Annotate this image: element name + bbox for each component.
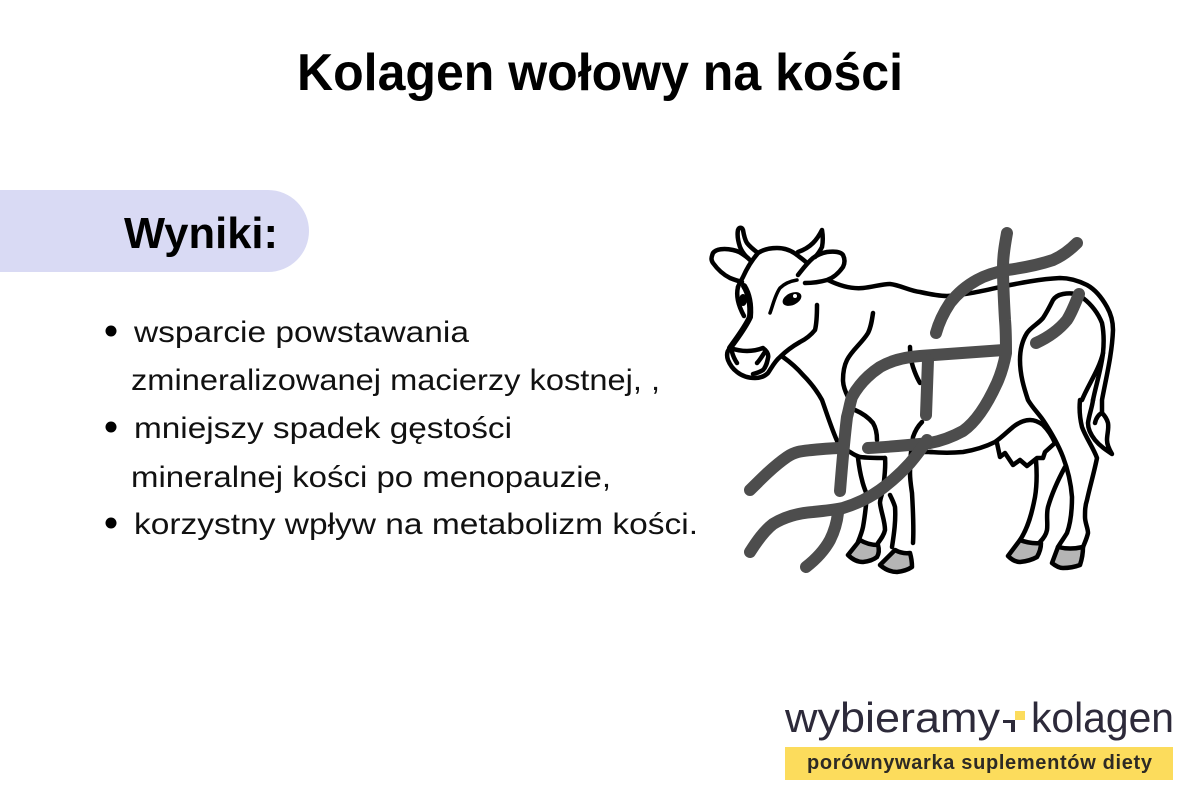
logo symbol — [1003, 711, 1025, 732]
panel: results heading: Wyniki: — [124, 209, 278, 258]
logo wordmark: wybieramy — [784, 694, 1000, 741]
results list: mniejszy spadek gęstości — [134, 412, 512, 445]
panel: results heading — [0, 190, 309, 272]
results list: korzystny wpływ na metabolizm kości. — [134, 508, 698, 541]
logo: porównywarka suplementów diety — [807, 752, 1153, 774]
results list: mineralnej kości po menopauzie, — [131, 461, 611, 494]
logo: kolagen — [1031, 694, 1174, 741]
icon: cow — [712, 228, 1113, 572]
results list: zmineralizowanej macierzy kostnej, , — [131, 364, 660, 397]
icon: collagen helix — [750, 233, 1079, 567]
results list — [106, 316, 698, 541]
results list: wsparcie powstawania — [133, 316, 469, 349]
logo — [784, 694, 1174, 780]
illustration: cow with collagen helix — [712, 228, 1113, 572]
title: Kolagen wołowy na kości — [297, 44, 903, 102]
logo tagline bar — [785, 747, 1173, 780]
